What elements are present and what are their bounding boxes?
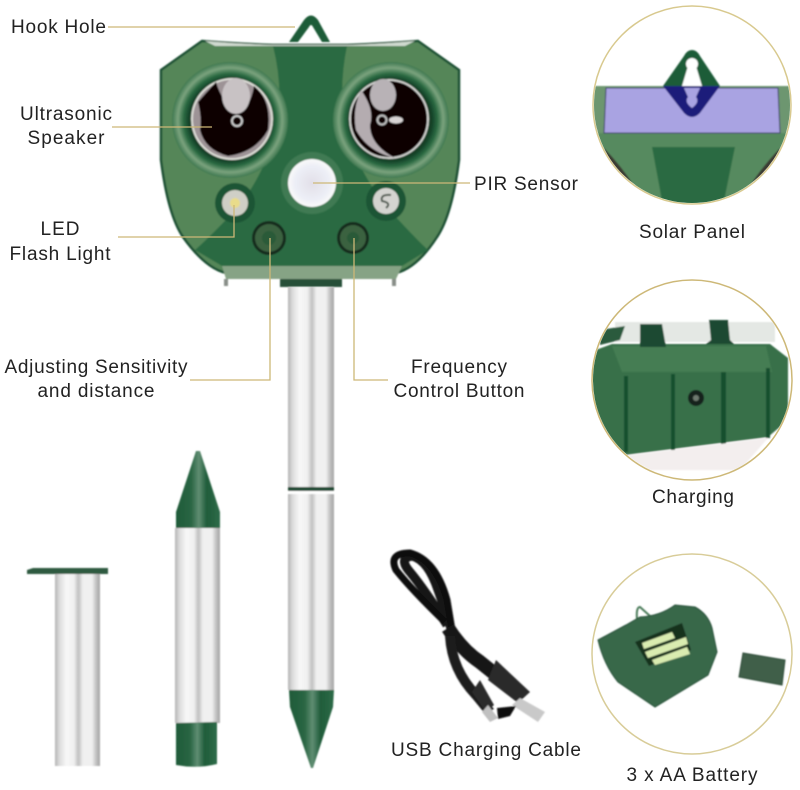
label: frequency control button: Control Button [394,381,524,402]
PIR sensor [281,152,343,214]
body shell [161,41,459,273]
icon: hook hole loop [289,16,330,42]
pole: middle spike section [175,451,220,767]
battery hook [637,607,650,619]
right LED [366,181,406,221]
bottom lip [222,266,402,279]
AA cells [642,632,690,665]
leader: ultrasonic speaker [112,126,212,128]
label: adjusting sensitivity: and distance [38,381,154,402]
label: charging: Charging [652,487,734,508]
cable loop [404,556,452,632]
label: PIR sensor: PIR Sensor [474,174,579,195]
leader: LED flash light [118,205,234,237]
label: ultrasonic speaker: Ultrasonic [20,104,112,125]
label: adjusting sensitivity: Adjusting Sensitivity [4,357,188,378]
label: ultrasonic speaker [20,104,112,149]
left speaker [172,62,288,178]
callout: battery [592,554,792,754]
label: USB charging cable: USB Charging Cable [391,740,581,761]
left LED [215,183,255,223]
label: LED flash light [10,219,111,265]
label: battery: 3 x AA Battery [626,765,758,786]
label: frequency control button: Frequency [411,357,508,378]
center dark panel [195,46,428,266]
USB charging cable [394,553,545,722]
top highlight [205,41,415,46]
callout: charging [590,280,792,480]
battery cover [739,653,785,685]
mount collar [280,279,342,287]
leader: adjusting sensitivity [190,238,270,380]
label: ultrasonic speaker: Speaker [28,128,105,149]
leader: PIR sensor [313,182,470,184]
label: LED flash light: LED [40,219,80,240]
left knob [252,221,286,255]
right knob [337,222,369,254]
label: LED flash light: Flash Light [10,244,111,265]
callout: solar panel [590,6,794,213]
battery compartment [635,623,691,666]
leader: frequency control [354,238,388,380]
pole: main stake [288,287,334,768]
label: adjusting sensitivity [4,357,188,402]
cable tail bundle [448,628,515,690]
barrel plug [472,680,494,712]
pole: flanged section [27,568,108,766]
label: hook hole: Hook Hole [11,17,106,38]
label: frequency control button [394,357,524,402]
leader: hook hole [108,26,295,28]
battery shell [598,605,717,707]
device: main repeller unit [161,16,459,287]
right speaker [333,62,449,178]
USB plug [488,660,530,703]
label: solar panel: Solar Panel [639,222,745,243]
